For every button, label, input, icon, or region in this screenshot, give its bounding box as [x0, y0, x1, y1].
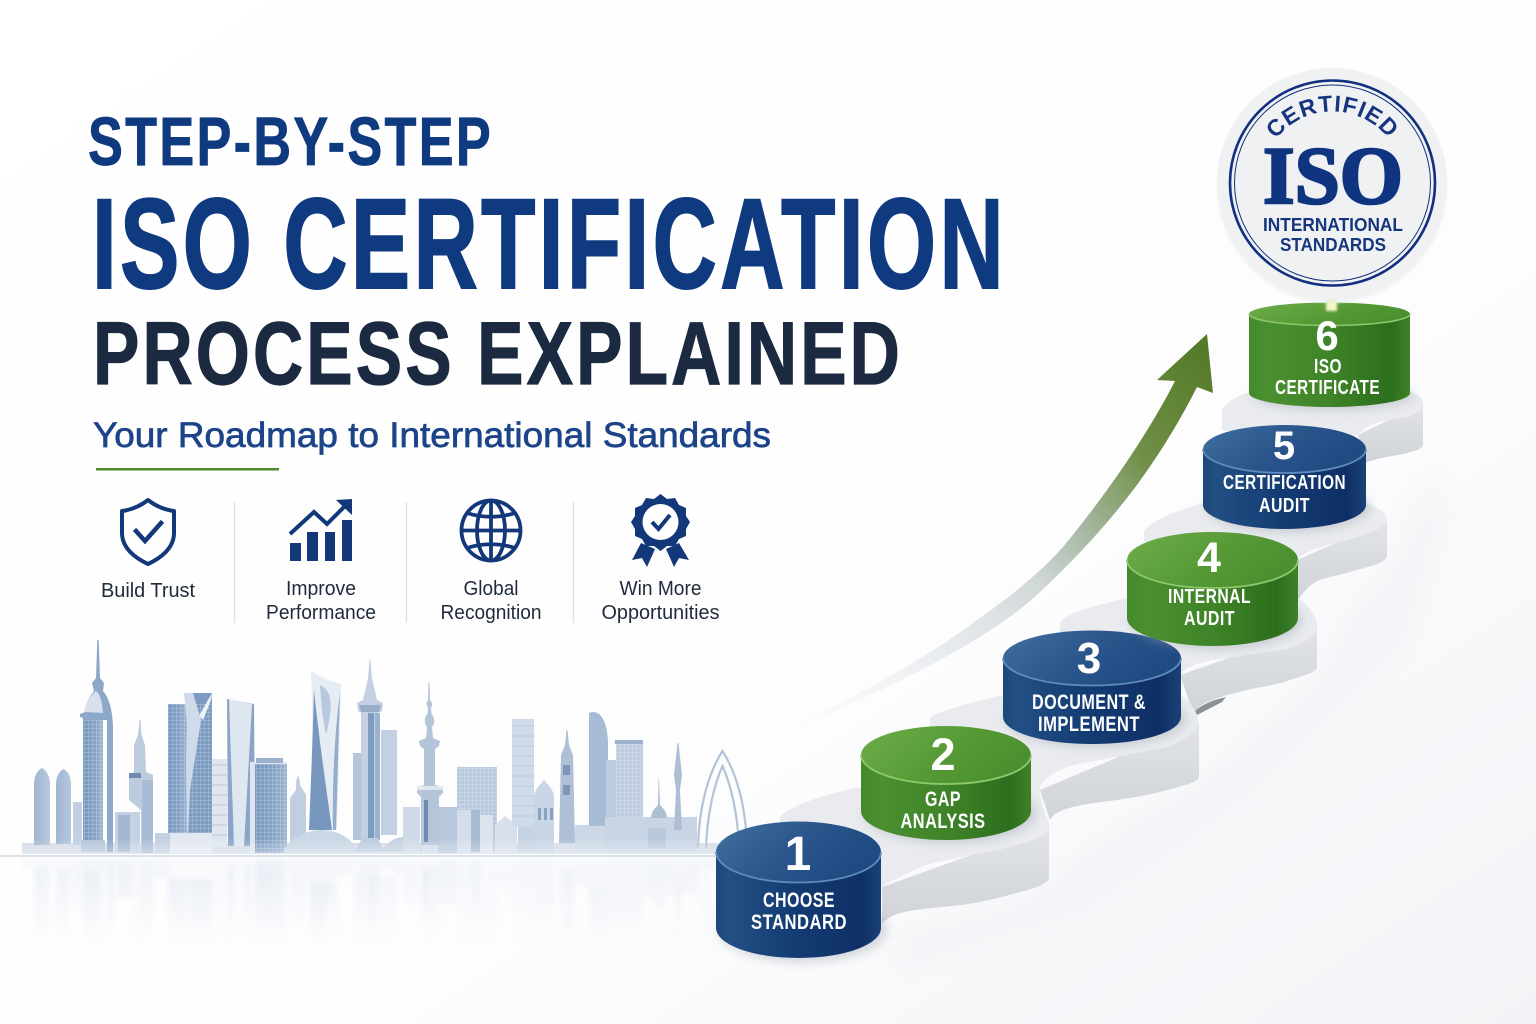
icon: award rosette	[631, 494, 690, 567]
number 1: 1	[785, 828, 811, 881]
label: win more opportunities: Win More	[620, 578, 702, 600]
certified arc text: CERTIFIED	[1268, 96, 1396, 136]
arrow rising to certificate	[760, 334, 1213, 742]
label ISO certificate: CERTIFICATE	[1275, 377, 1380, 399]
cylinder 3	[1003, 630, 1186, 747]
label certification audit: AUDIT	[1259, 495, 1310, 517]
label document and implement: DOCUMENT &	[1032, 691, 1146, 714]
heading: step-by-step: STEP-BY-STEP	[88, 103, 493, 180]
subtitle: Your Roadmap to International Standards	[93, 416, 771, 455]
skyline	[0, 640, 747, 855]
ISO badge	[1217, 68, 1447, 304]
step 5: certification audit	[1203, 424, 1370, 532]
icon: growth chart	[290, 499, 352, 561]
heading: ISO certification: ISO CERTIFICATION	[92, 173, 1007, 316]
platform: under steps 4 and 5	[1144, 503, 1387, 600]
platform: under steps 1 and 2	[780, 787, 1049, 923]
label gap analysis: ANALYSIS	[900, 810, 986, 833]
benefits row	[101, 494, 720, 624]
stair platforms	[780, 392, 1450, 970]
title block	[88, 103, 1007, 455]
label internal audit: AUDIT	[1184, 608, 1235, 630]
platform: under steps 3 and 4	[1060, 598, 1317, 715]
step 6: ISO certificate	[1249, 302, 1414, 410]
label: win more opportunities: Opportunities	[602, 602, 720, 624]
platform: under steps 2 and 3	[930, 695, 1199, 820]
step 4: internal audit	[1127, 532, 1302, 649]
label: improve performance: Performance	[266, 602, 376, 624]
number 3: 3	[1077, 634, 1101, 683]
heading: process explained: PROCESS EXPLAINED	[93, 303, 903, 403]
step 1: choose standard	[716, 822, 887, 962]
label internal audit: INTERNAL	[1168, 586, 1251, 608]
label ISO certificate: ISO	[1314, 356, 1342, 378]
label choose standard: STANDARD	[751, 911, 847, 934]
benefit: global recognition	[440, 500, 542, 624]
ISO wordmark: ISO	[1263, 130, 1403, 221]
icon: globe	[462, 500, 520, 561]
badge caption: INTERNATIONAL	[1263, 215, 1403, 235]
platform shadow	[900, 470, 1450, 970]
benefit: build trust	[101, 500, 195, 602]
cylinder 1	[716, 822, 887, 962]
number 5: 5	[1273, 424, 1295, 468]
cylinder 4	[1127, 532, 1302, 649]
label certification audit: CERTIFICATION	[1223, 472, 1346, 494]
label choose standard: CHOOSE	[763, 889, 835, 912]
platform: under steps 5 and 6	[1222, 392, 1423, 463]
label: improve performance: Improve	[286, 578, 356, 600]
cylinder 2	[861, 726, 1036, 843]
label gap analysis: GAP	[925, 788, 961, 811]
number 2: 2	[930, 729, 956, 780]
skyline reflection	[34, 859, 698, 918]
benefit: win more opportunities	[602, 494, 720, 624]
cylinder 6	[1249, 302, 1414, 410]
label: global recognition: Global	[464, 578, 518, 600]
step 3: document and implement	[1003, 630, 1186, 747]
label: build trust: Build Trust	[101, 580, 195, 602]
label: global recognition: Recognition	[440, 602, 542, 624]
benefit: improve performance	[266, 499, 376, 624]
icon: shield	[122, 500, 174, 564]
cylinder 5	[1203, 425, 1370, 532]
badge caption: STANDARDS	[1280, 235, 1386, 255]
skyline ground line	[0, 855, 720, 857]
certificate stem glow	[1326, 296, 1337, 311]
number 4: 4	[1197, 534, 1221, 582]
step 2: gap analysis	[861, 726, 1036, 843]
label document and implement: IMPLEMENT	[1038, 713, 1140, 736]
number 6: 6	[1315, 312, 1339, 359]
